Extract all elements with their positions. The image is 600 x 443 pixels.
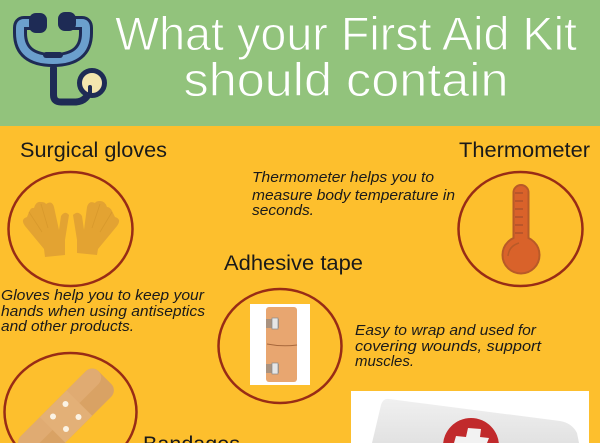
icon: gloves in circle	[8, 172, 132, 286]
heading: surgical gloves: Surgical gloves	[20, 138, 167, 162]
icon: adhesive tape in circle	[218, 289, 342, 403]
icon: bandage in circle	[4, 353, 136, 443]
title	[115, 7, 577, 106]
text: adhesive tape description	[355, 323, 542, 370]
text: thermometer description	[252, 170, 455, 219]
text: adhesive tape description: muscles.	[355, 354, 414, 370]
panel: yellow background	[0, 126, 600, 443]
icon: thermometer in circle	[458, 172, 582, 286]
title: should contain	[184, 53, 508, 106]
text: adhesive tape description: Easy to wrap and used for	[355, 323, 537, 339]
title: What your First Aid Kit	[115, 7, 577, 60]
text: gloves description: and other products.	[1, 319, 134, 335]
text: thermometer description: seconds.	[252, 203, 314, 219]
text: adhesive tape description: covering wounds, support	[355, 339, 542, 355]
text: gloves description: Gloves help you to keep your	[1, 288, 205, 304]
heading: thermometer: Thermometer	[459, 138, 590, 162]
text: thermometer description: Thermometer helps you to	[252, 170, 434, 186]
text: gloves description	[1, 288, 205, 335]
text: thermometer description: measure body temperature in	[252, 188, 455, 204]
panel: green header	[0, 0, 600, 126]
heading: adhesive tape: Adhesive tape	[224, 251, 363, 275]
text: gloves description: hands when using antiseptics	[1, 304, 205, 320]
icon: first aid kit photo	[351, 391, 589, 443]
icon: stethoscope	[20, 12, 104, 102]
